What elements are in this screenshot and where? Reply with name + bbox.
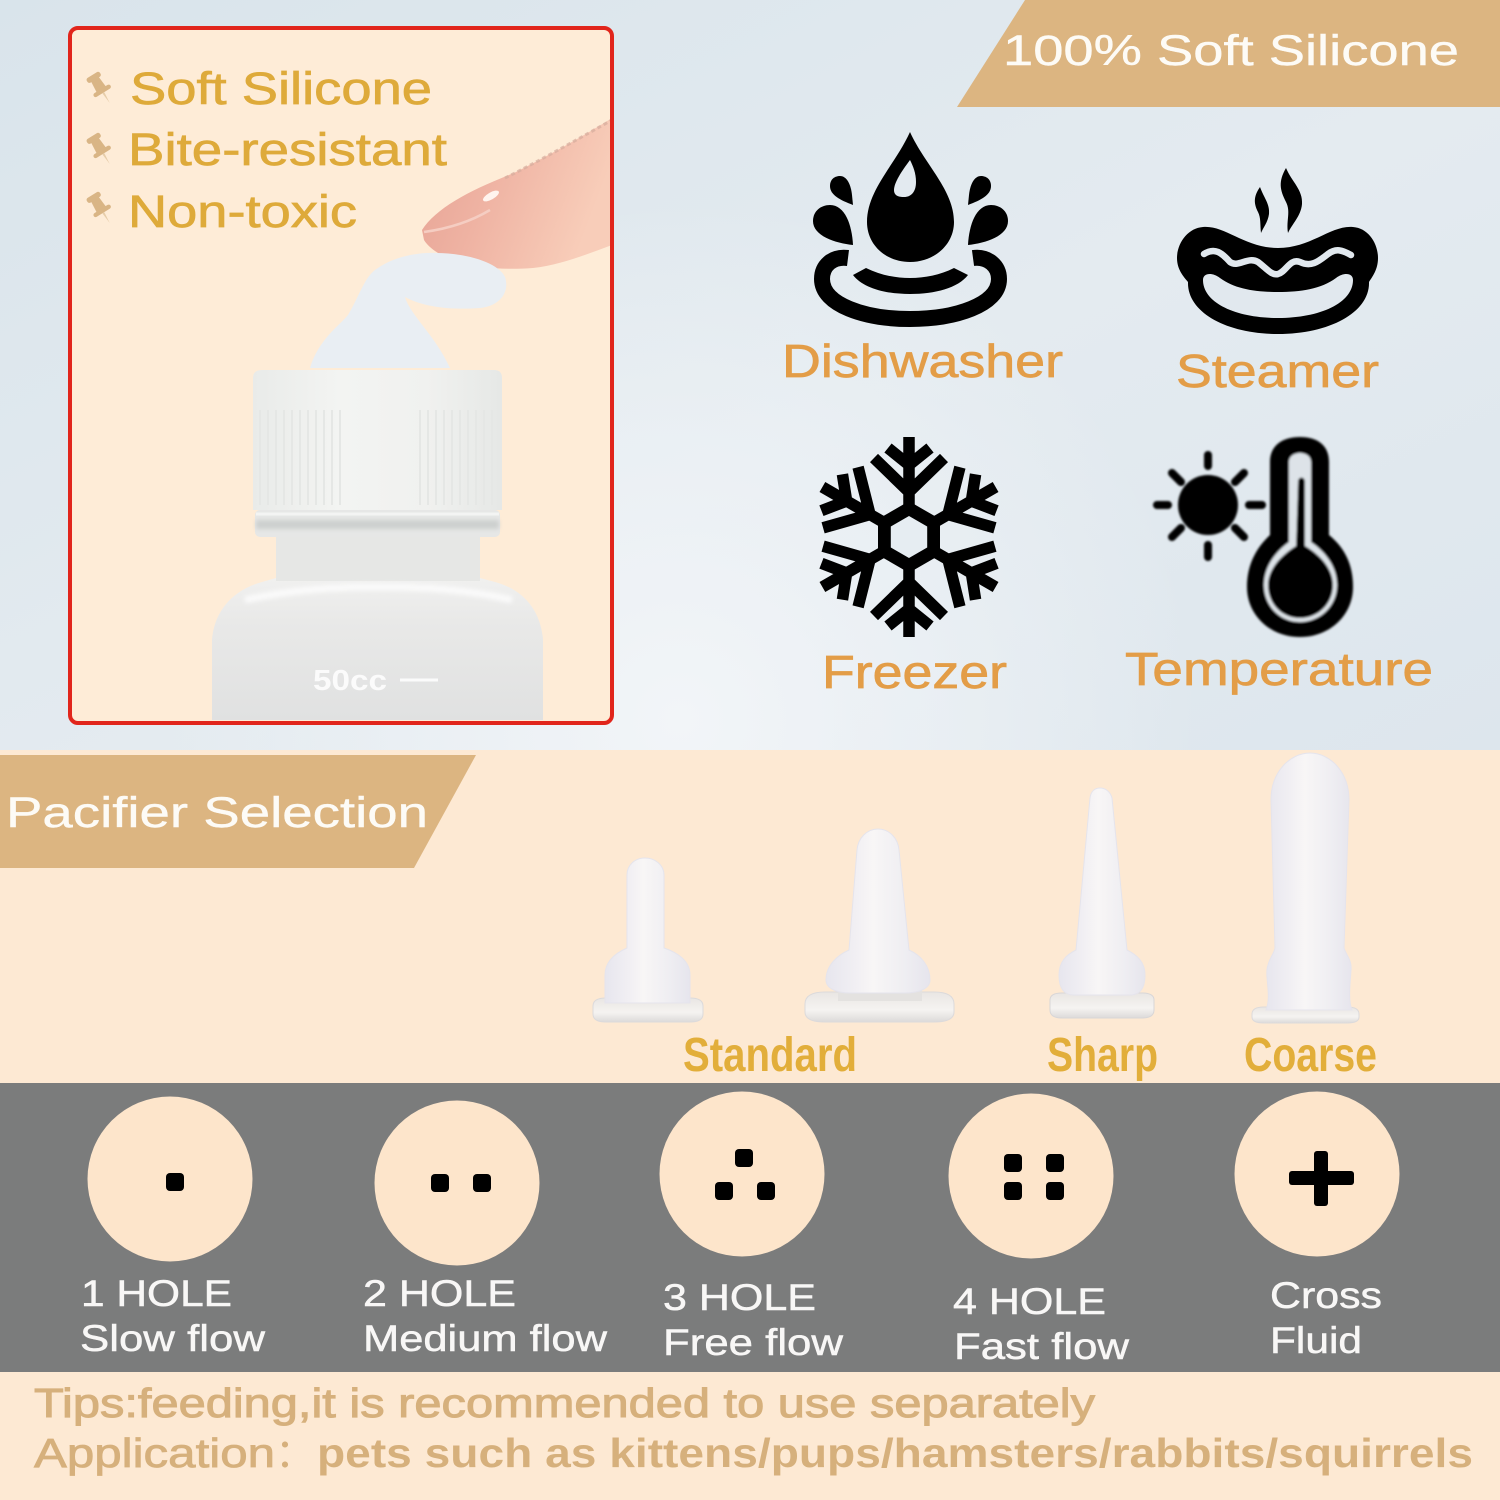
icon: steamer hot dog bbox=[1177, 168, 1378, 334]
text: application: Application bbox=[34, 1430, 275, 1476]
hole type: 1 hole: Slow flow bbox=[80, 1318, 265, 1359]
banner: 100% Soft Silicone bbox=[957, 0, 1500, 107]
label: Coarse: Coarse bbox=[1244, 1029, 1377, 1082]
hole type: cross: Fluid bbox=[1270, 1320, 1362, 1361]
hole type: 2 hole bbox=[363, 1100, 607, 1359]
icon: pushpin 2 bbox=[84, 131, 118, 169]
text: application: pets such as kittens/pups/hamsters/rabbits/squirrels bbox=[317, 1430, 1473, 1476]
hole type: 3 hole: 3 HOLE bbox=[663, 1277, 816, 1318]
text: tips: Tips:feeding,it is recommended to use separately bbox=[34, 1380, 1096, 1426]
hole type: 2 hole: 2 HOLE bbox=[363, 1273, 516, 1314]
label: Standard: Standard bbox=[683, 1029, 857, 1082]
label: Steamer: Steamer bbox=[1176, 345, 1379, 397]
pacifier: sharp bbox=[1050, 788, 1154, 1018]
banner: 100% Soft Silicone: 100% Soft Silicone bbox=[1003, 27, 1459, 75]
label: Sharp: Sharp bbox=[1047, 1029, 1158, 1082]
feature list bbox=[84, 63, 448, 237]
text: Non-toxic: Non-toxic bbox=[128, 186, 357, 237]
pacifier: standard small bbox=[593, 858, 703, 1022]
panel: soft silicone photo bbox=[70, 28, 612, 723]
pacifier: coarse bbox=[1252, 753, 1359, 1023]
icon: temperature sun and thermometer bbox=[1157, 437, 1353, 637]
icon: pushpin 3 bbox=[84, 190, 118, 228]
label: Freezer: Freezer bbox=[822, 646, 1007, 698]
photo: finger pressing silicone teat on bottle: 50cc bbox=[313, 665, 387, 697]
background: upper section bbox=[0, 0, 1500, 750]
hole type: cross bbox=[1234, 1092, 1400, 1361]
hole type: 3 hole: Free flow bbox=[663, 1322, 843, 1363]
label: Dishwasher: Dishwasher bbox=[782, 335, 1063, 387]
hole type: 4 hole bbox=[948, 1094, 1129, 1367]
hole type: cross: Cross bbox=[1270, 1275, 1382, 1316]
hole type: 1 hole bbox=[80, 1096, 265, 1359]
hole type: 2 hole: Medium flow bbox=[363, 1318, 607, 1359]
photo: finger pressing silicone teat on bottle bbox=[212, 118, 612, 720]
section: tips background bbox=[0, 1372, 1500, 1500]
hole type: 1 hole: 1 HOLE bbox=[81, 1273, 232, 1314]
banner: Pacifier Selection bbox=[0, 755, 476, 868]
icon: dishwasher water drop bbox=[813, 132, 1008, 319]
section: hole types band bbox=[0, 1083, 1500, 1372]
hole type: 4 hole: Fast flow bbox=[954, 1326, 1129, 1367]
section: pacifier selection background bbox=[0, 750, 1500, 1083]
text: Soft Silicone: Soft Silicone bbox=[130, 63, 432, 114]
text: application: ： bbox=[275, 1432, 315, 1476]
icon: freezer snowflake bbox=[805, 437, 1013, 637]
pacifier: standard large bbox=[805, 829, 954, 1022]
hole type: 4 hole: 4 HOLE bbox=[953, 1281, 1106, 1322]
banner: Pacifier Selection: Pacifier Selection bbox=[6, 789, 428, 837]
label: Temperature: Temperature bbox=[1125, 643, 1433, 695]
hole type: 3 hole bbox=[660, 1092, 843, 1363]
text: Bite-resistant: Bite-resistant bbox=[128, 124, 448, 175]
icon: pushpin 1 bbox=[84, 70, 118, 108]
